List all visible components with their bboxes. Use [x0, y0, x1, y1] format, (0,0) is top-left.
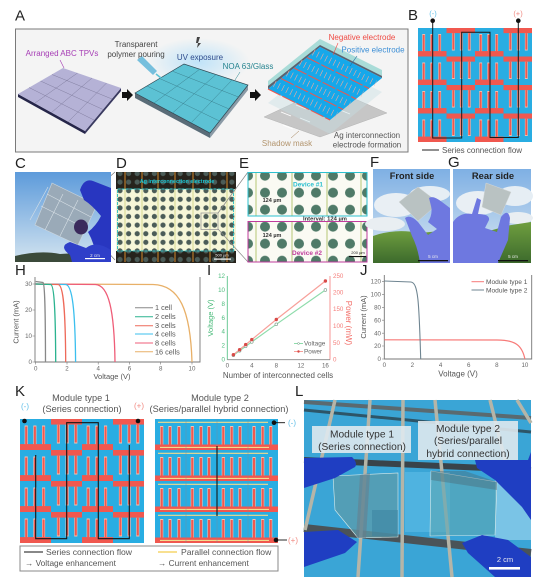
shadow mask — [264, 87, 387, 137]
terminal negative — [21, 402, 29, 423]
voltage series — [232, 289, 327, 357]
panel label H: H — [15, 262, 26, 279]
label: Shadow mask: Shadow mask — [262, 139, 313, 148]
x tick labels: 4 — [96, 366, 100, 372]
x tick labels — [383, 362, 529, 369]
label box: module type 1: (Series connection) — [318, 442, 406, 453]
glove bottom left — [304, 530, 357, 567]
legend H: 8 cells — [155, 339, 176, 348]
y tick labels: 0 — [378, 356, 382, 363]
zoom guide lines D to E — [218, 172, 248, 262]
x tick labels: 10 — [189, 366, 196, 372]
label: Negative electrode — [329, 33, 396, 55]
panel label D: D — [116, 155, 127, 172]
right tick labels: 0 — [333, 357, 337, 364]
panel label B: B — [408, 7, 418, 24]
right tick labels — [333, 273, 344, 364]
axis label: cells: Number of interconnected cells — [223, 371, 333, 380]
glove right — [80, 180, 111, 262]
y tick labels: 20 — [374, 343, 382, 350]
right tick labels: 150 — [333, 306, 344, 313]
glove — [453, 198, 510, 263]
right tick labels: 250 — [333, 273, 344, 280]
transparent module — [399, 187, 439, 221]
x tick labels: 6 — [128, 366, 132, 372]
label: Arranged ABC TPVs: Arranged ABC TPVs — [26, 49, 98, 58]
x tick labels — [34, 366, 196, 372]
y tick labels: 40 — [374, 330, 382, 337]
left tick labels: 2 — [222, 343, 226, 350]
label box: module type 1: Module type 1 — [330, 430, 394, 440]
glove bottom — [64, 242, 111, 262]
arrow 1 — [122, 89, 133, 101]
legend I — [294, 341, 326, 356]
label: Device #2: Device #2 — [292, 250, 322, 257]
terminal negative — [429, 9, 437, 23]
panel label C: C — [15, 155, 26, 172]
x tick labels: 4 — [439, 362, 443, 369]
x tick labels: 8 — [495, 362, 499, 369]
panel label L: L — [295, 383, 303, 400]
scale bar E: 200 µm — [351, 250, 365, 255]
left tick labels: 4 — [222, 329, 226, 336]
legend H: 2 cells — [155, 312, 176, 321]
panel label A: A — [15, 8, 25, 24]
module 1 series flow — [36, 423, 129, 539]
panel label G: G — [448, 154, 460, 171]
terminal negative module 2 — [272, 418, 296, 428]
left tick labels: 12 — [218, 273, 226, 280]
panel label E: E — [239, 155, 249, 172]
x tick labels: 4 — [250, 362, 254, 370]
axis label: current: Current (mA) — [359, 295, 368, 339]
terminal negative module 2: (-) — [288, 418, 296, 428]
legend box: → Voltage enhancement — [25, 558, 117, 568]
label: Shadow mask — [262, 131, 313, 148]
glove bottom right — [462, 535, 531, 577]
panel: rear side photo — [453, 169, 533, 263]
glove top left — [304, 457, 356, 488]
module 2 series flow — [216, 446, 218, 516]
panel label K: K — [15, 383, 25, 400]
panel: module types comparison — [20, 393, 298, 571]
left tick labels: 10 — [218, 287, 226, 294]
scale bar D: 500 µm — [215, 252, 229, 258]
label box: module type 2: (Series/parallel — [434, 436, 502, 447]
x tick labels: 6 — [467, 362, 471, 369]
terminal positive: (+) — [513, 9, 523, 18]
panel: microscope image — [116, 172, 236, 263]
label: Ag interconnection electrode: Ag interconnection electrode — [140, 179, 214, 185]
icon: pouring nozzle — [137, 56, 161, 78]
x tick labels: 8 — [275, 362, 279, 370]
y tick labels: 120 — [371, 278, 382, 285]
module 2 grid — [155, 419, 278, 543]
label: interval 124 µm: Interval: 124 µm — [303, 216, 347, 222]
right tick labels: 200 — [333, 290, 344, 297]
label box: module type 1 — [312, 426, 411, 453]
legend H — [135, 303, 180, 356]
chart I: voltage and power vs cells — [206, 273, 353, 380]
electrode stack — [268, 39, 382, 134]
glass module 2 — [430, 471, 497, 536]
curve: module type 2 — [384, 281, 421, 359]
left tick labels: 8 — [222, 301, 226, 308]
label: UV exposure: UV exposure — [177, 53, 224, 62]
x tick labels: 0 — [34, 366, 38, 372]
UV glow — [146, 38, 250, 86]
y tick labels — [371, 278, 382, 363]
right tick labels: 100 — [333, 323, 344, 330]
left tick labels — [218, 273, 226, 364]
label: Transparent polymer pouring: Transparent — [115, 40, 157, 49]
panel label I: I — [207, 262, 211, 279]
y tick labels — [25, 281, 33, 366]
axis label: Current: Current (mA) — [12, 300, 20, 344]
label: NOA 63/Glass: NOA 63/Glass — [223, 62, 273, 71]
glove top right — [475, 452, 531, 520]
title: Rear side: Rear side — [472, 170, 514, 181]
label: 124 µm: 124 µm — [263, 198, 281, 204]
transparent module — [482, 183, 511, 215]
legend H: 16 cells — [155, 347, 180, 356]
zoom guide lines C to D — [80, 172, 115, 260]
label: Positive electrode — [341, 46, 405, 66]
terminal positive — [513, 9, 523, 23]
selection square — [201, 213, 218, 230]
y tick labels: 20 — [25, 307, 33, 314]
power series — [232, 279, 327, 356]
terminal positive — [134, 402, 144, 423]
module grid B — [418, 28, 532, 142]
legend J: Module type 1 — [486, 279, 528, 286]
x tick labels — [226, 362, 329, 370]
transparent module — [30, 183, 97, 245]
terminal negative: (-) — [21, 402, 29, 411]
label: Ag interconnection electrode formation: electrode formation — [333, 140, 401, 150]
panel: fabrication process — [16, 29, 408, 152]
curves — [36, 282, 192, 362]
title module type 2: Module type 2 — [191, 393, 249, 403]
terminal negative: (-) — [429, 9, 437, 18]
x tick labels: 0 — [226, 362, 230, 370]
legend box: Parallel connection flow — [181, 547, 272, 557]
legend B: Series connection flow — [442, 146, 522, 155]
legend box: Series connection flow — [46, 547, 133, 557]
glove — [405, 197, 450, 263]
module 1 grid — [20, 419, 144, 543]
series flow line — [433, 21, 518, 138]
legend I: Voltage — [304, 341, 326, 348]
panel: building facade photo — [303, 399, 532, 578]
x tick labels: 10 — [521, 362, 529, 369]
panel: device #1 micrograph — [248, 172, 367, 216]
first plate: arranged TPVs — [18, 68, 121, 134]
label: 124 µm: 124 µm — [263, 233, 281, 239]
axis label: voltage: Voltage (V) — [438, 370, 478, 378]
title module type 1: Module type 1 — [52, 393, 110, 403]
label: Ag interconnection electrode formation: Ag interconnection — [334, 131, 400, 140]
y tick labels: 30 — [25, 281, 33, 288]
y tick labels: 10 — [25, 333, 33, 340]
legend H: 3 cells — [155, 321, 176, 330]
left tick labels: 6 — [222, 315, 226, 322]
axis label: voltage: Voltage (V) — [206, 299, 215, 337]
title: Front side: Front side — [390, 171, 434, 181]
label: Transparent polymer pouring: polymer pouring — [107, 50, 165, 59]
chart H: I-V curves by number of cells — [12, 277, 200, 381]
legend I: Power — [304, 349, 323, 356]
terminal positive module 2: (+) — [288, 536, 298, 545]
x tick labels: 8 — [159, 366, 163, 372]
x tick labels: 2 — [411, 362, 415, 369]
label: Arranged ABC TPVs — [26, 49, 98, 68]
legend box: → Current enhancement — [158, 558, 250, 568]
panel label J: J — [360, 262, 368, 279]
label box: module type 2 — [418, 421, 518, 460]
label: NOA 63/Glass — [223, 62, 273, 80]
panel: series connection diagram — [418, 9, 532, 155]
curve: module type 1 — [384, 340, 525, 359]
window frames — [304, 400, 531, 577]
scale bar L — [489, 555, 520, 570]
legend box — [20, 546, 278, 571]
title module type 2: (Series/parallel hybrid connection) — [150, 404, 288, 414]
axis label: Voltage: Voltage (V) — [93, 372, 131, 381]
legend H: 1 cell — [155, 303, 172, 312]
right tick labels: 50 — [333, 340, 340, 347]
y tick labels: 100 — [371, 291, 382, 298]
terminal positive module 2 — [274, 536, 298, 545]
panel: device #2 micrograph — [248, 221, 367, 262]
scale bar C: 2 cm — [90, 253, 100, 258]
scale bar F: 5 cm — [428, 254, 438, 259]
second plate: polymer coated — [135, 64, 248, 138]
y tick labels: 0 — [29, 359, 33, 366]
x tick labels: 2 — [65, 366, 69, 372]
label box: module type 2: hybrid connection) — [426, 449, 510, 460]
panel: front side photo — [365, 169, 450, 263]
label: Device #1: Device #1 — [293, 182, 323, 188]
left tick labels: 0 — [222, 357, 226, 364]
icon: UV lamp — [196, 37, 201, 48]
arrow 2 — [250, 89, 261, 101]
legend J — [472, 279, 528, 294]
label: Positive electrode: Positive electrode — [341, 46, 405, 54]
legend J: Module type 2 — [486, 287, 528, 294]
x tick labels: 12 — [297, 362, 305, 370]
scale bar G: 5 cm — [508, 254, 518, 259]
axis label: power: Power (mW) — [344, 301, 353, 346]
x tick labels: 16 — [322, 362, 329, 370]
scale bar L: 2 cm — [497, 555, 513, 564]
glass module 1 — [333, 473, 398, 538]
title module type 1: (Series connection) — [42, 404, 122, 414]
panel: photo of module in hand — [15, 172, 111, 262]
label: Negative electrode: Negative electrode — [329, 33, 396, 42]
chart J: module IV curves — [359, 275, 532, 378]
x tick labels: 0 — [383, 362, 387, 369]
label box: module type 2: Module type 2 — [436, 424, 500, 435]
y tick labels: 60 — [374, 317, 382, 324]
terminal positive: (+) — [134, 402, 144, 410]
panel label F: F — [370, 154, 379, 171]
legend H: 4 cells — [155, 330, 176, 339]
y tick labels: 80 — [374, 304, 382, 311]
